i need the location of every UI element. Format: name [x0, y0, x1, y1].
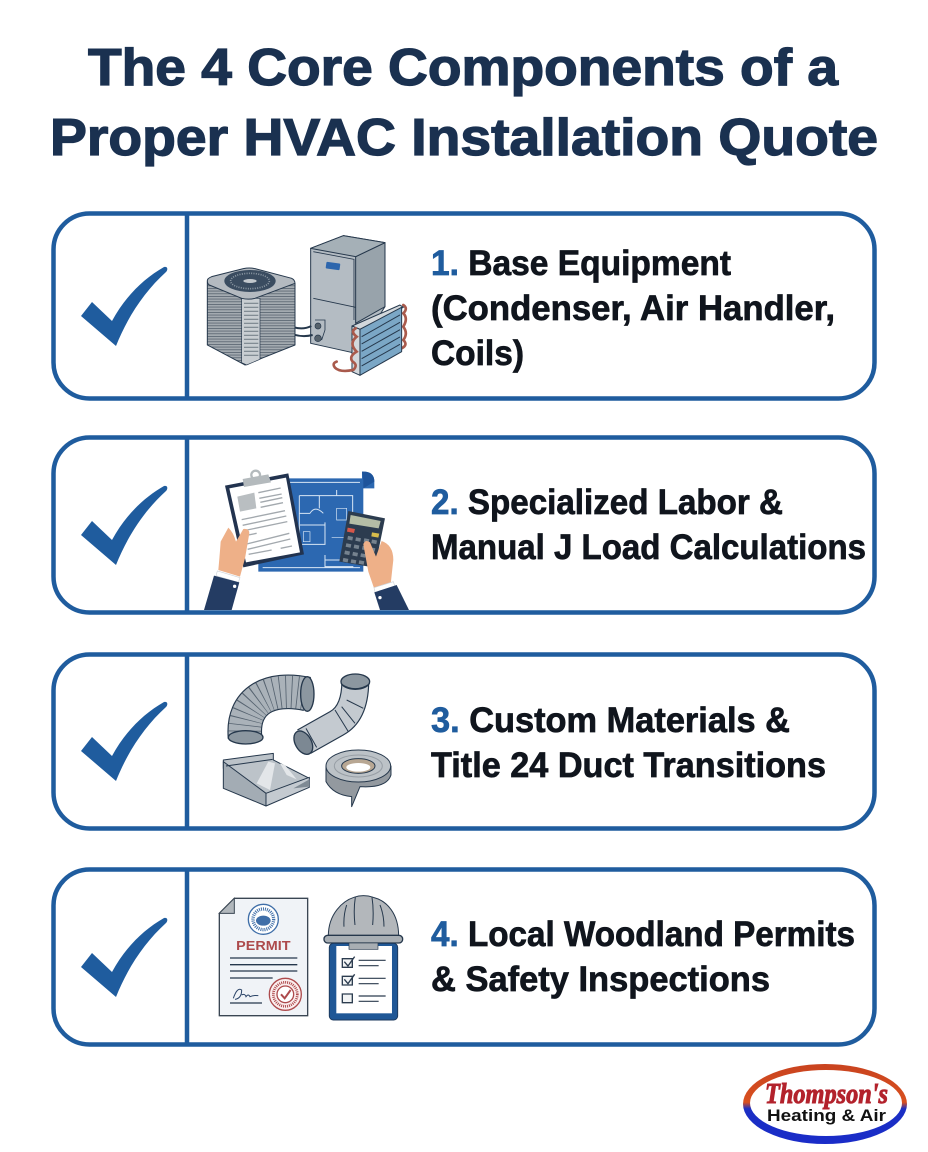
text: item 2	[431, 483, 866, 567]
panel: specialized labor	[54, 437, 874, 612]
icon: checkmark	[81, 918, 167, 997]
logo: Thompson's Heating & Air: Heating & Air	[767, 1106, 886, 1125]
title	[50, 39, 878, 167]
icon: checkmark	[81, 702, 167, 781]
text: item 4: 4. Local Woodland Permits	[431, 915, 855, 954]
title: The 4 Core Components of a	[88, 39, 839, 97]
text: item 2: Manual J Load Calculations	[431, 528, 866, 567]
text: item 3: 3. Custom Materials &	[431, 701, 790, 740]
icon: clipboard, blueprint and calculator	[204, 471, 409, 610]
title: Proper HVAC Installation Quote	[50, 109, 878, 167]
logo: Thompson's Heating & Air	[743, 1064, 907, 1144]
text: item 3: Title 24 Duct Transitions	[431, 746, 826, 785]
logo: Thompson's Heating & Air: Thompson's	[765, 1078, 888, 1110]
panel: custom materials	[54, 654, 874, 829]
text: item 2: 2. Specialized Labor &	[431, 483, 783, 522]
panel: base equipment	[54, 213, 874, 398]
text: item 1	[431, 244, 835, 373]
icon: permit document and hard hat checklist	[219, 896, 403, 1020]
panel: local permits	[54, 869, 874, 1045]
icon: ducts, transition and foil tape	[223, 674, 391, 807]
icon: checkmark	[81, 486, 167, 565]
text: item 4	[431, 915, 855, 999]
text: item 4: & Safety Inspections	[431, 960, 770, 999]
icon: permit document and hard hat checklist: PERMIT	[236, 938, 290, 953]
text: item 1: (Condenser, Air Handler,	[431, 289, 835, 328]
text: item 1: 1. Base Equipment	[431, 244, 731, 283]
text: item 3	[431, 701, 826, 785]
icon: checkmark	[81, 267, 167, 346]
text: item 1: Coils)	[431, 334, 524, 373]
icon: condenser, air handler and coil	[207, 236, 406, 375]
